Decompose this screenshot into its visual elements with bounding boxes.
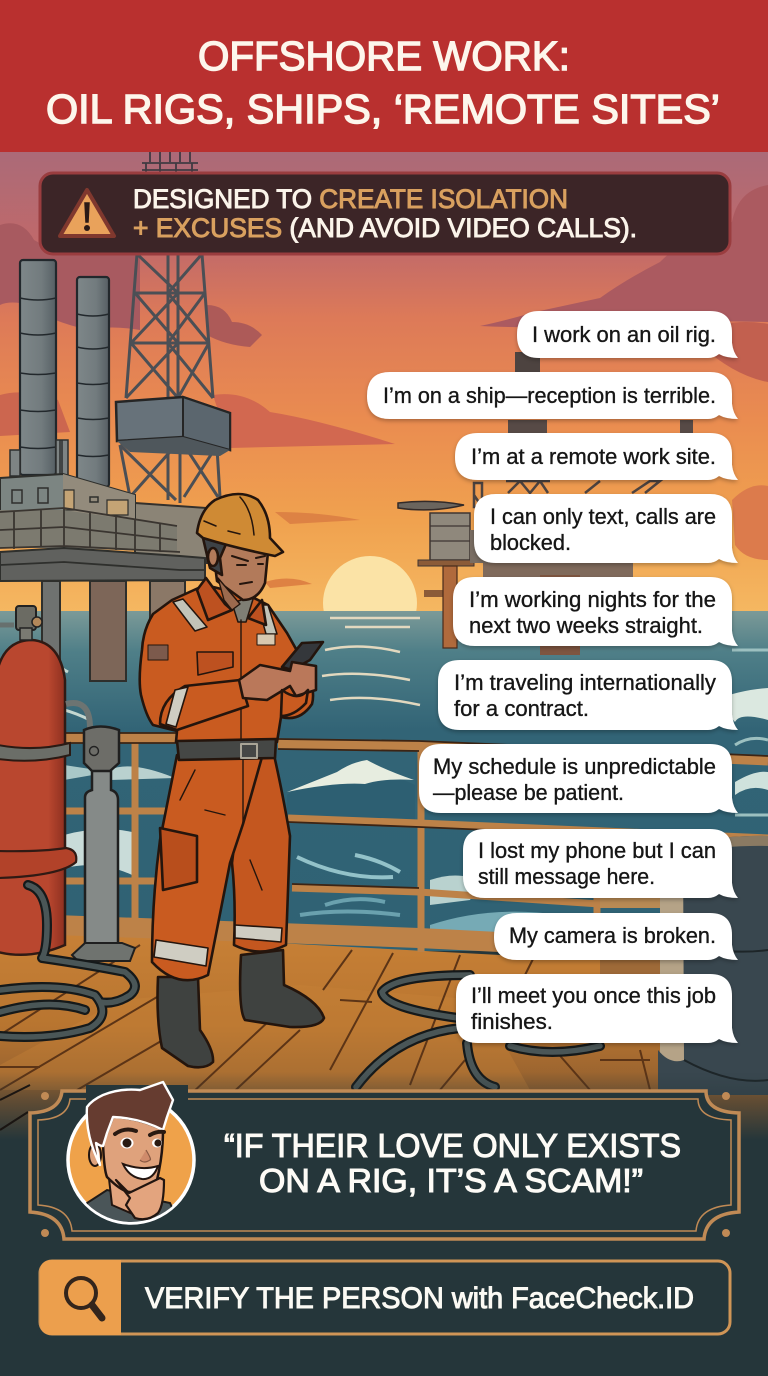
gas cylinder and gauge post bbox=[0, 606, 135, 961]
collar bbox=[197, 578, 266, 625]
bubble: unpredictable schedule: My schedule is unpredictable bbox=[433, 754, 716, 779]
grey undershirt bbox=[232, 596, 254, 622]
bubble: camera broken: My camera is broken. bbox=[509, 923, 716, 948]
facial features bbox=[232, 556, 265, 584]
sunset sky background bbox=[0, 152, 768, 622]
right leg bbox=[232, 755, 290, 952]
bubble: ship reception bbox=[367, 372, 738, 419]
quote text: “IF THEIR LOVE ONLY EXISTS bbox=[224, 1127, 681, 1164]
main oil rig on the left bbox=[0, 152, 230, 681]
wooden fittings behind the barrel bbox=[600, 898, 660, 908]
icon: magnifying glass bbox=[66, 1278, 102, 1318]
warning text: DESIGNED TO CREATE ISOLATION bbox=[133, 184, 568, 214]
left boot bbox=[158, 977, 213, 1067]
verify text: VERIFY THE PERSON with FaceCheck.ID bbox=[145, 1282, 694, 1315]
bubble: camera broken bbox=[494, 913, 738, 960]
title text: OFFSHORE WORK: bbox=[198, 33, 570, 79]
chat bubbles: excuses bbox=[367, 311, 738, 1043]
bubble: remote site bbox=[455, 433, 738, 480]
chest pocket and patches bbox=[197, 652, 233, 675]
exhaust stacks bbox=[10, 260, 109, 487]
dark barrel on the right bbox=[658, 836, 768, 1095]
top of derrick above banner bbox=[142, 152, 198, 172]
clouds bbox=[0, 185, 768, 588]
avatar: smiling man with hand on chin bbox=[68, 1082, 194, 1225]
block behind deck bbox=[135, 503, 207, 563]
dark bottom background bbox=[0, 1072, 768, 1376]
quote panel bbox=[30, 1082, 739, 1239]
hands bbox=[239, 662, 316, 700]
bubble: lost phone: I lost my phone but I can bbox=[478, 838, 716, 863]
bubble: oil rig bbox=[517, 311, 738, 358]
bubble: only text: I can only text, calls are bbox=[490, 504, 716, 529]
bubble: lost phone: still message here. bbox=[478, 864, 655, 889]
distant oil rig bbox=[398, 352, 693, 655]
leg fold lines bbox=[180, 760, 262, 890]
bubble: traveling: for a contract. bbox=[454, 696, 589, 721]
warning banner bbox=[40, 173, 730, 254]
neck and face bbox=[212, 540, 268, 600]
bubble: traveling: I’m traveling internationally bbox=[454, 670, 717, 695]
torso and sleeves bbox=[140, 585, 313, 742]
railing bbox=[0, 733, 768, 1000]
icon: warning triangle bbox=[60, 190, 114, 236]
hard hat bbox=[197, 494, 283, 556]
title header bbox=[0, 0, 768, 152]
warning text bbox=[133, 184, 637, 243]
sea with waves bbox=[0, 611, 768, 951]
belt bbox=[177, 739, 276, 760]
sun bbox=[323, 556, 417, 650]
forearm sleeve bbox=[160, 680, 248, 730]
bubble: meet once job finishes: finishes. bbox=[471, 1009, 553, 1034]
bubble: working nights: next two weeks straight. bbox=[469, 613, 703, 638]
cargo pocket bbox=[160, 828, 197, 890]
left leg bbox=[152, 755, 262, 980]
bubble: meet once job finishes bbox=[456, 974, 738, 1043]
right boot bbox=[240, 950, 324, 1027]
bubble: ship reception: I’m on a ship—reception is terrible. bbox=[383, 383, 716, 408]
bubble: only text: blocked. bbox=[490, 530, 571, 555]
bubble: remote site: I’m at a remote work site. bbox=[471, 444, 716, 469]
platform building bbox=[0, 474, 135, 525]
derrick tower bbox=[120, 254, 220, 503]
bubble: traveling bbox=[438, 660, 738, 730]
sleeve reflective band bbox=[166, 687, 188, 727]
platform legs bbox=[42, 581, 60, 671]
phone bbox=[282, 642, 323, 670]
offshore worker using phone bbox=[140, 494, 324, 1067]
bubble: oil rig: I work on an oil rig. bbox=[532, 322, 716, 347]
quote text bbox=[224, 1127, 681, 1199]
reflective shoulder straps bbox=[173, 599, 277, 634]
bubble: unpredictable schedule: —please be patient. bbox=[433, 780, 624, 805]
warning text: + EXCUSES (AND AVOID VIDEO CALLS). bbox=[133, 213, 637, 243]
title text: OIL RIGS, SHIPS, ‘REMOTE SITES’ bbox=[46, 86, 720, 132]
hair and ear bbox=[203, 538, 226, 575]
bubble: only text bbox=[474, 494, 738, 563]
title text bbox=[46, 33, 720, 132]
bubble: working nights: I’m working nights for the bbox=[469, 587, 716, 612]
reflective bands on legs bbox=[154, 925, 282, 966]
bubble: unpredictable schedule bbox=[419, 744, 738, 813]
ornate frame bbox=[30, 1091, 739, 1239]
quote text: ON A RIG, IT’S A SCAM!” bbox=[259, 1162, 643, 1199]
platform rails bbox=[0, 510, 177, 552]
bubble: meet once job finishes: I’ll meet you once this job bbox=[471, 983, 716, 1008]
hoses bbox=[0, 885, 600, 1087]
wooden deck bbox=[0, 928, 768, 1140]
bubble: lost phone bbox=[463, 829, 738, 898]
bubble: working nights bbox=[453, 577, 738, 646]
verify call to action bar bbox=[40, 1260, 730, 1335]
